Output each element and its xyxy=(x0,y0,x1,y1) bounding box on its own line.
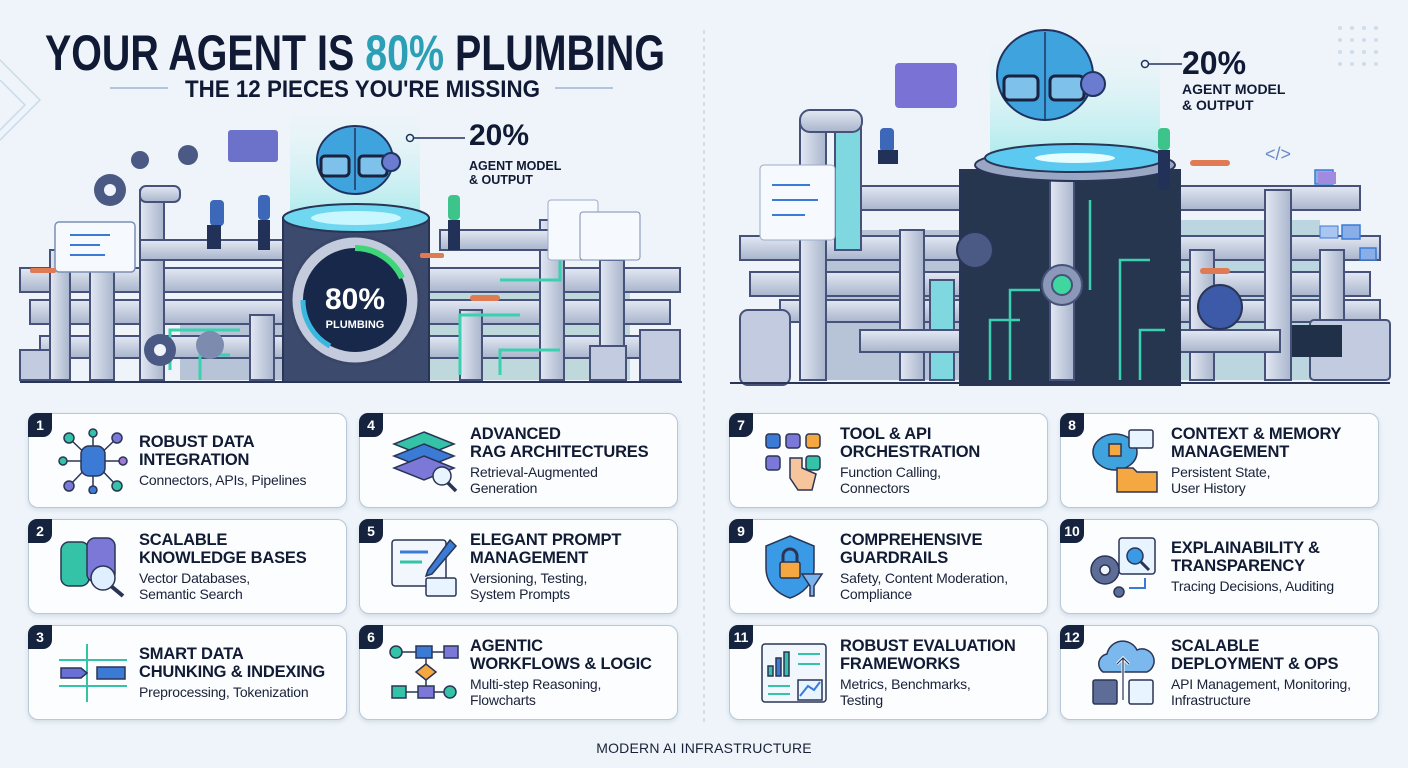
card 6: Flowcharts xyxy=(470,692,536,708)
callout: 20% left: 20% xyxy=(469,119,529,152)
tank xyxy=(960,170,1180,385)
card 7: Function Calling, xyxy=(840,464,941,480)
card 1 xyxy=(28,413,347,508)
card 6: Multi-step Reasoning, xyxy=(470,676,601,692)
card 10: 10 xyxy=(1064,523,1080,539)
icon: cloud deployment xyxy=(1092,640,1155,705)
card 12: SCALABLE xyxy=(1171,637,1259,655)
card 5: ELEGANT PROMPT xyxy=(470,531,621,549)
windows xyxy=(55,222,135,272)
card 8 xyxy=(1060,413,1379,508)
card 4: RAG ARCHITECTURES xyxy=(470,443,648,461)
card 10: EXPLAINABILITY & xyxy=(1171,539,1320,557)
icon: flowchart xyxy=(389,645,459,699)
tank xyxy=(283,218,429,382)
icon: layers with magnifier xyxy=(392,431,458,492)
footer: MODERN AI INFRASTRUCTURE xyxy=(596,740,812,756)
card 7: 7 xyxy=(737,417,745,433)
card 4: Generation xyxy=(470,480,537,496)
brain icon right xyxy=(996,29,1106,121)
card 9: Compliance xyxy=(840,586,912,602)
card 9: Safety, Content Moderation, xyxy=(840,570,1008,586)
card 2: SCALABLE xyxy=(139,531,227,549)
card 8: User History xyxy=(1171,480,1246,496)
illustration: right plumbing xyxy=(730,63,1391,386)
card 6: WORKFLOWS & LOGIC xyxy=(470,655,652,673)
illustration: left plumbing with 80% tank: 80% xyxy=(325,283,385,316)
card 3: 3 xyxy=(36,629,44,645)
card 2: Vector Databases, xyxy=(139,570,250,586)
card 1: 1 xyxy=(36,417,44,433)
card 2: Semantic Search xyxy=(139,586,243,602)
callout: 20% right: & OUTPUT xyxy=(1182,97,1254,113)
card 1: INTEGRATION xyxy=(139,451,249,469)
callout: 20% left: AGENT MODEL xyxy=(469,159,561,173)
card 6: 6 xyxy=(367,629,375,645)
card 7: TOOL & API xyxy=(840,425,931,443)
card 3: CHUNKING & INDEXING xyxy=(139,663,325,681)
card 4 xyxy=(359,413,678,508)
windows xyxy=(760,165,835,240)
card 9: COMPREHENSIVE xyxy=(840,531,982,549)
card 8: 8 xyxy=(1068,417,1076,433)
card 11 xyxy=(729,625,1048,720)
illustration: left plumbing with 80% tank: PLUMBING xyxy=(326,319,384,331)
card 6: AGENTIC xyxy=(470,637,543,655)
card 3: Preprocessing, Tokenization xyxy=(139,684,308,700)
card 3: SMART DATA xyxy=(139,645,244,663)
card 5: MANAGEMENT xyxy=(470,549,588,567)
card 6 xyxy=(359,625,678,720)
callout: 20% right: 20% xyxy=(1182,45,1246,81)
icon: gears and inspect xyxy=(1090,537,1156,598)
card 5: System Prompts xyxy=(470,586,570,602)
card 10 xyxy=(1060,519,1379,614)
gears xyxy=(94,145,224,366)
card 8: CONTEXT & MEMORY xyxy=(1171,425,1341,443)
card 5 xyxy=(359,519,678,614)
card 7 xyxy=(729,413,1048,508)
card 12: 12 xyxy=(1064,629,1080,645)
card 9: 9 xyxy=(737,523,745,539)
card 10: Tracing Decisions, Auditing xyxy=(1171,578,1334,594)
card 12: DEPLOYMENT & OPS xyxy=(1171,655,1338,673)
card 8: MANAGEMENT xyxy=(1171,443,1289,461)
card 11: ROBUST EVALUATION xyxy=(840,637,1016,655)
card 9 xyxy=(729,519,1048,614)
card 1: Connectors, APIs, Pipelines xyxy=(139,472,306,488)
card 12: Infrastructure xyxy=(1171,692,1251,708)
icon: dashboard xyxy=(761,643,827,703)
card 7: Connectors xyxy=(840,480,910,496)
card 4: 4 xyxy=(367,417,375,433)
illustration: left plumbing with 80% tank xyxy=(19,130,682,383)
card 2 xyxy=(28,519,347,614)
card 9: GUARDRAILS xyxy=(840,549,948,567)
card 4: ADVANCED xyxy=(470,425,561,443)
card 3 xyxy=(28,625,347,720)
callout: 20% right xyxy=(1140,45,1285,113)
icon: database network xyxy=(58,428,128,494)
card 2: KNOWLEDGE BASES xyxy=(139,549,307,567)
callout: 20% left xyxy=(406,119,561,187)
card 5: 5 xyxy=(367,523,375,539)
icon: databases search xyxy=(60,537,124,598)
card 11: FRAMEWORKS xyxy=(840,655,960,673)
card 12: API Management, Monitoring, xyxy=(1171,676,1351,692)
flow diagram xyxy=(1315,170,1376,260)
icon: tool grid with hand xyxy=(765,433,821,491)
card 11: Testing xyxy=(840,692,883,708)
card 4: Retrieval-Augmented xyxy=(470,464,598,480)
people xyxy=(880,128,1170,152)
card 8: Persistent State, xyxy=(1171,464,1270,480)
card 2: 2 xyxy=(36,523,44,539)
card 5: Versioning, Testing, xyxy=(470,570,587,586)
callout: 20% left: & OUTPUT xyxy=(469,173,533,187)
callout: 20% right: AGENT MODEL xyxy=(1182,81,1285,97)
card 7: ORCHESTRATION xyxy=(840,443,980,461)
card 1: ROBUST DATA xyxy=(139,433,254,451)
icon: shield lock xyxy=(765,535,824,599)
illustration: right plumbing: </> xyxy=(1265,144,1291,164)
icon: chunking xyxy=(59,644,127,702)
card 12 xyxy=(1060,625,1379,720)
valves xyxy=(30,253,500,301)
card 10: TRANSPARENCY xyxy=(1171,557,1305,575)
icon: brain and folder xyxy=(1092,429,1158,493)
people xyxy=(210,195,460,226)
card 11: Metrics, Benchmarks, xyxy=(840,676,971,692)
brain icon left xyxy=(316,125,401,195)
icon: prompt editor xyxy=(391,538,457,597)
card 11: 11 xyxy=(734,629,748,645)
